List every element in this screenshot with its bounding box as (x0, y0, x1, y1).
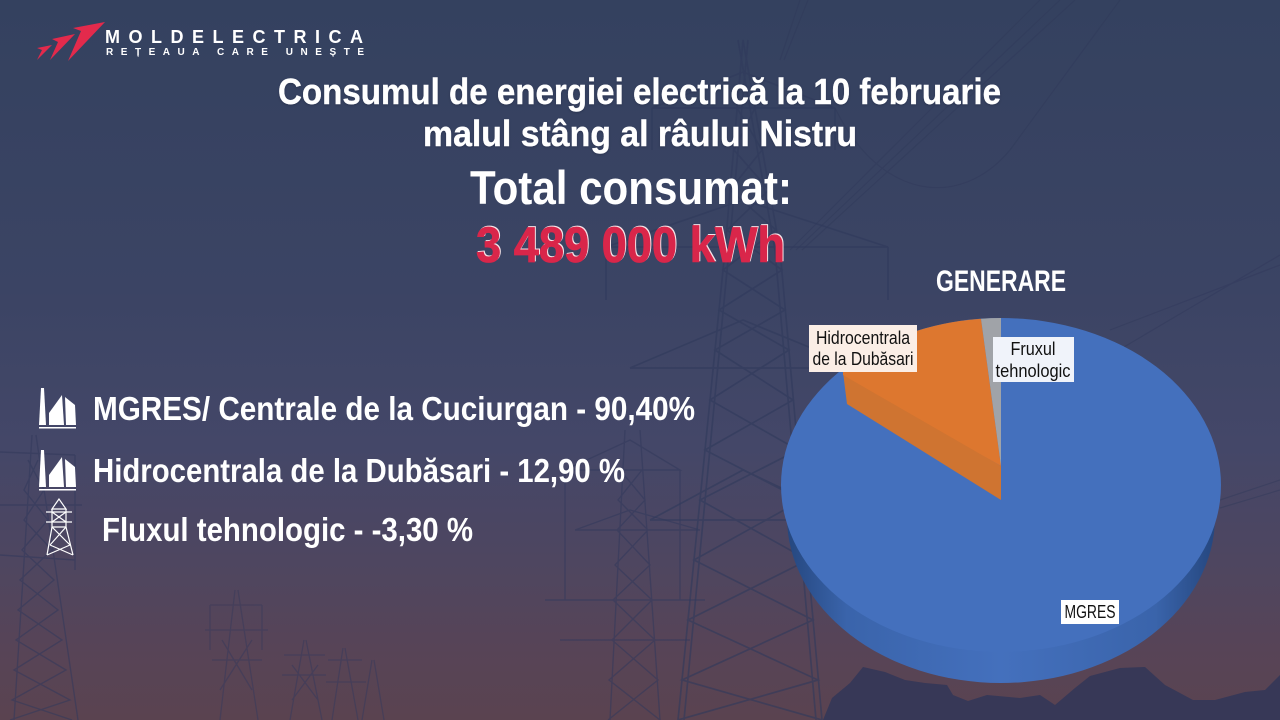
logo: Moldelectrica (37, 22, 364, 61)
pie side (787, 351, 1215, 683)
title (278, 71, 1001, 154)
label: Fluxul: tehnologic (996, 361, 1070, 381)
pie slice: Fluxul (981, 318, 1001, 466)
legend item: Fluxul: Fluxul tehnologic - -3,30 % (102, 511, 473, 548)
total consumed heading: Total consumat: (470, 161, 792, 214)
logo tagline: REȚEAUA CARE UNEȘTE (106, 47, 364, 58)
pie slice: MGRES (781, 318, 1221, 652)
icon: hydro plant (39, 450, 76, 490)
legend list (39, 388, 695, 555)
chart title: GENERARE (936, 265, 1066, 298)
pie slice: Hidrocentrala (843, 319, 1001, 500)
logo name: MOLDELECTRICA (105, 27, 363, 47)
legend item: Dubasari: Hidrocentrala de la Dubăsari - 12,90 % (93, 452, 625, 489)
label: Hidrocentrala: de la Dubăsari (812, 349, 914, 369)
title: malul stâng al râului Nistru (423, 113, 857, 154)
label: MGRES (1061, 600, 1119, 624)
tree line (823, 667, 1280, 720)
title: Consumul de energiei electrică la 10 februarie (278, 71, 1001, 112)
label: Hidrocentrala: Hidrocentrala (816, 328, 911, 348)
label: Hidrocentrala (809, 325, 917, 372)
label: MGRES: MGRES (1064, 602, 1116, 622)
legend item: MGRES: MGRES/ Centrale de la Cuciurgan - 90,40% (93, 390, 695, 427)
icon: red arrows (37, 22, 105, 61)
label: Fluxul (993, 337, 1074, 382)
icon: pylon (46, 499, 73, 555)
icon: power plant (39, 388, 76, 428)
total consumed value: 3 489 000 kWh (476, 217, 785, 273)
label: Fluxul: Fruxul (1010, 339, 1056, 359)
pie chart: generare (781, 318, 1221, 683)
